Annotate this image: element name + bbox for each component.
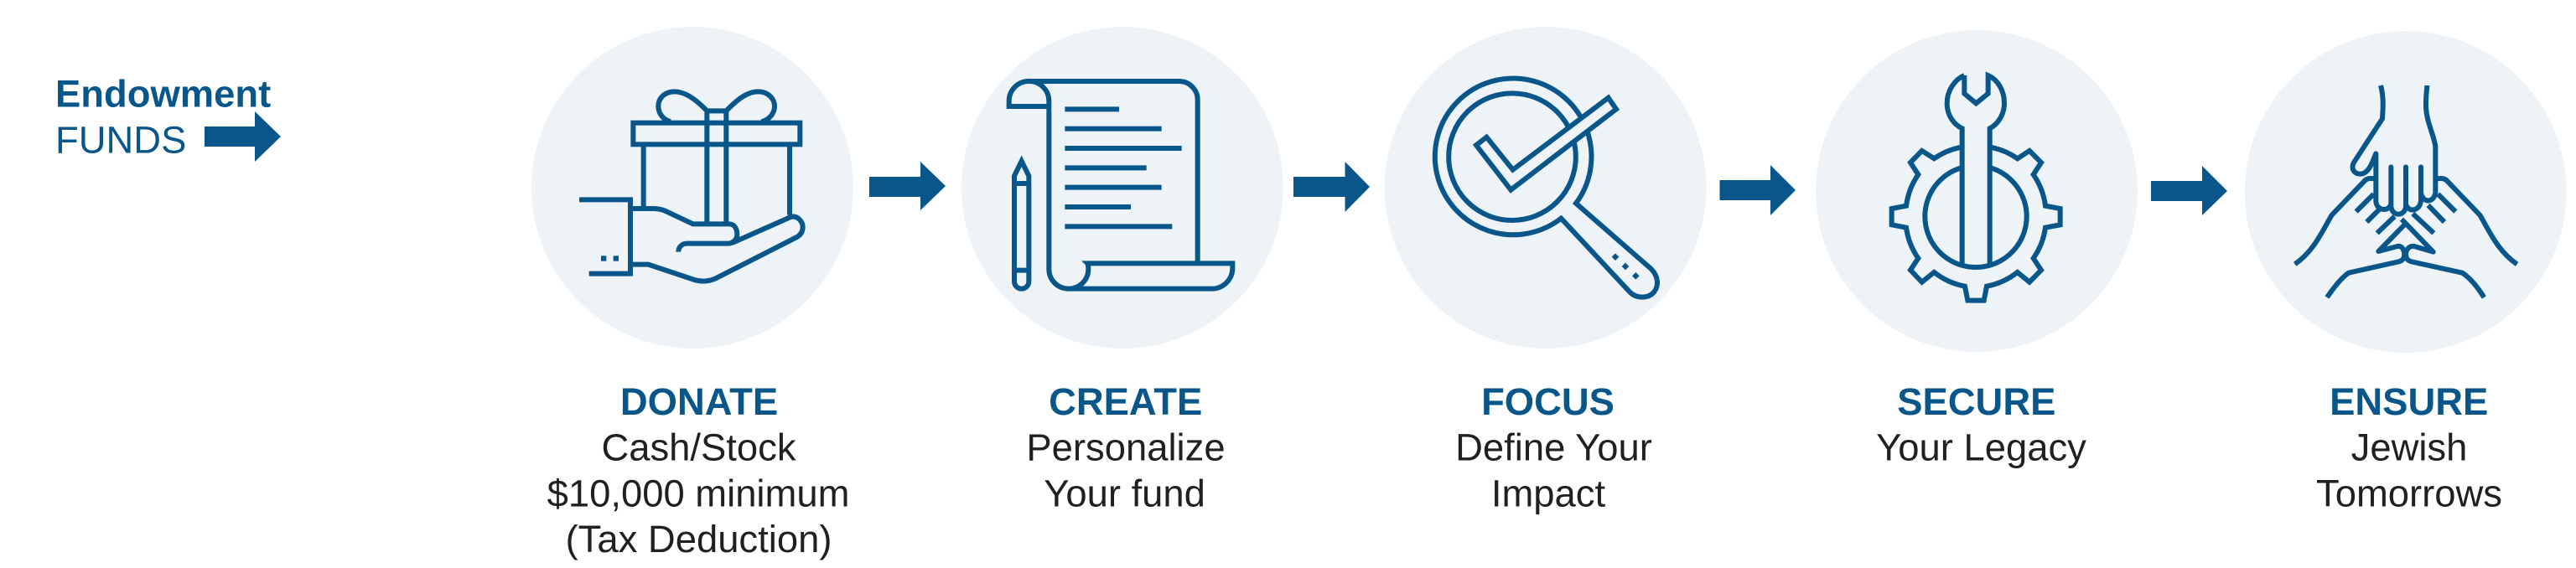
label: donate text bbox=[547, 380, 849, 560]
label: focus text: Impact bbox=[1491, 472, 1605, 514]
title: Endowment FUNDS with arrow: FUNDS bbox=[55, 119, 186, 161]
label: donate text: DONATE bbox=[620, 380, 778, 423]
arrow: create to focus bbox=[1293, 162, 1370, 212]
label: ensure text bbox=[2316, 380, 2502, 514]
label: create text: Your fund bbox=[1044, 472, 1205, 514]
circle: create background bbox=[961, 27, 1283, 349]
label: ensure text: Tomorrows bbox=[2316, 472, 2502, 514]
label: focus text: Define Your bbox=[1455, 426, 1652, 469]
icon: magnifier with check mark bbox=[1435, 79, 1657, 297]
step 2: create bbox=[961, 27, 1283, 514]
label: secure text: Your Legacy bbox=[1876, 426, 2086, 469]
label: ensure text: ENSURE bbox=[2330, 380, 2488, 423]
icon: joined hands bbox=[2295, 85, 2517, 297]
label: focus text: FOCUS bbox=[1481, 380, 1615, 423]
step 3: focus bbox=[1385, 27, 1707, 514]
arrow: secure to ensure bbox=[2151, 166, 2227, 215]
title: Endowment FUNDS with arrow bbox=[55, 73, 281, 162]
icon: wrench and gear bbox=[1892, 75, 2060, 301]
icon: scroll and pencil bbox=[1009, 81, 1232, 289]
label: donate text: $10,000 minimum bbox=[547, 472, 849, 514]
arrow: focus to secure bbox=[1720, 165, 1796, 215]
label: create text: Personalize bbox=[1026, 426, 1226, 469]
step 5: ensure bbox=[2245, 31, 2567, 514]
label: donate text: Cash/Stock bbox=[601, 426, 796, 469]
circle: secure background bbox=[1816, 30, 2138, 352]
icon: hand holding gift bbox=[579, 91, 803, 281]
label: ensure text: Jewish bbox=[2351, 426, 2467, 469]
step 4: secure bbox=[1816, 30, 2138, 469]
circle: ensure background bbox=[2245, 31, 2567, 353]
label: create text bbox=[1026, 380, 1226, 514]
label: secure text: SECURE bbox=[1897, 380, 2055, 423]
label: focus text bbox=[1455, 380, 1652, 514]
label: secure text bbox=[1876, 380, 2086, 469]
label: donate text: (Tax Deduction) bbox=[566, 518, 832, 560]
step 1: donate bbox=[531, 27, 853, 560]
circle: donate background bbox=[531, 27, 853, 349]
arrow: donate to create bbox=[869, 162, 946, 210]
title: Endowment FUNDS with arrow: Endowment bbox=[55, 73, 271, 116]
circle: focus background bbox=[1385, 27, 1707, 349]
label: create text: CREATE bbox=[1049, 380, 1202, 423]
